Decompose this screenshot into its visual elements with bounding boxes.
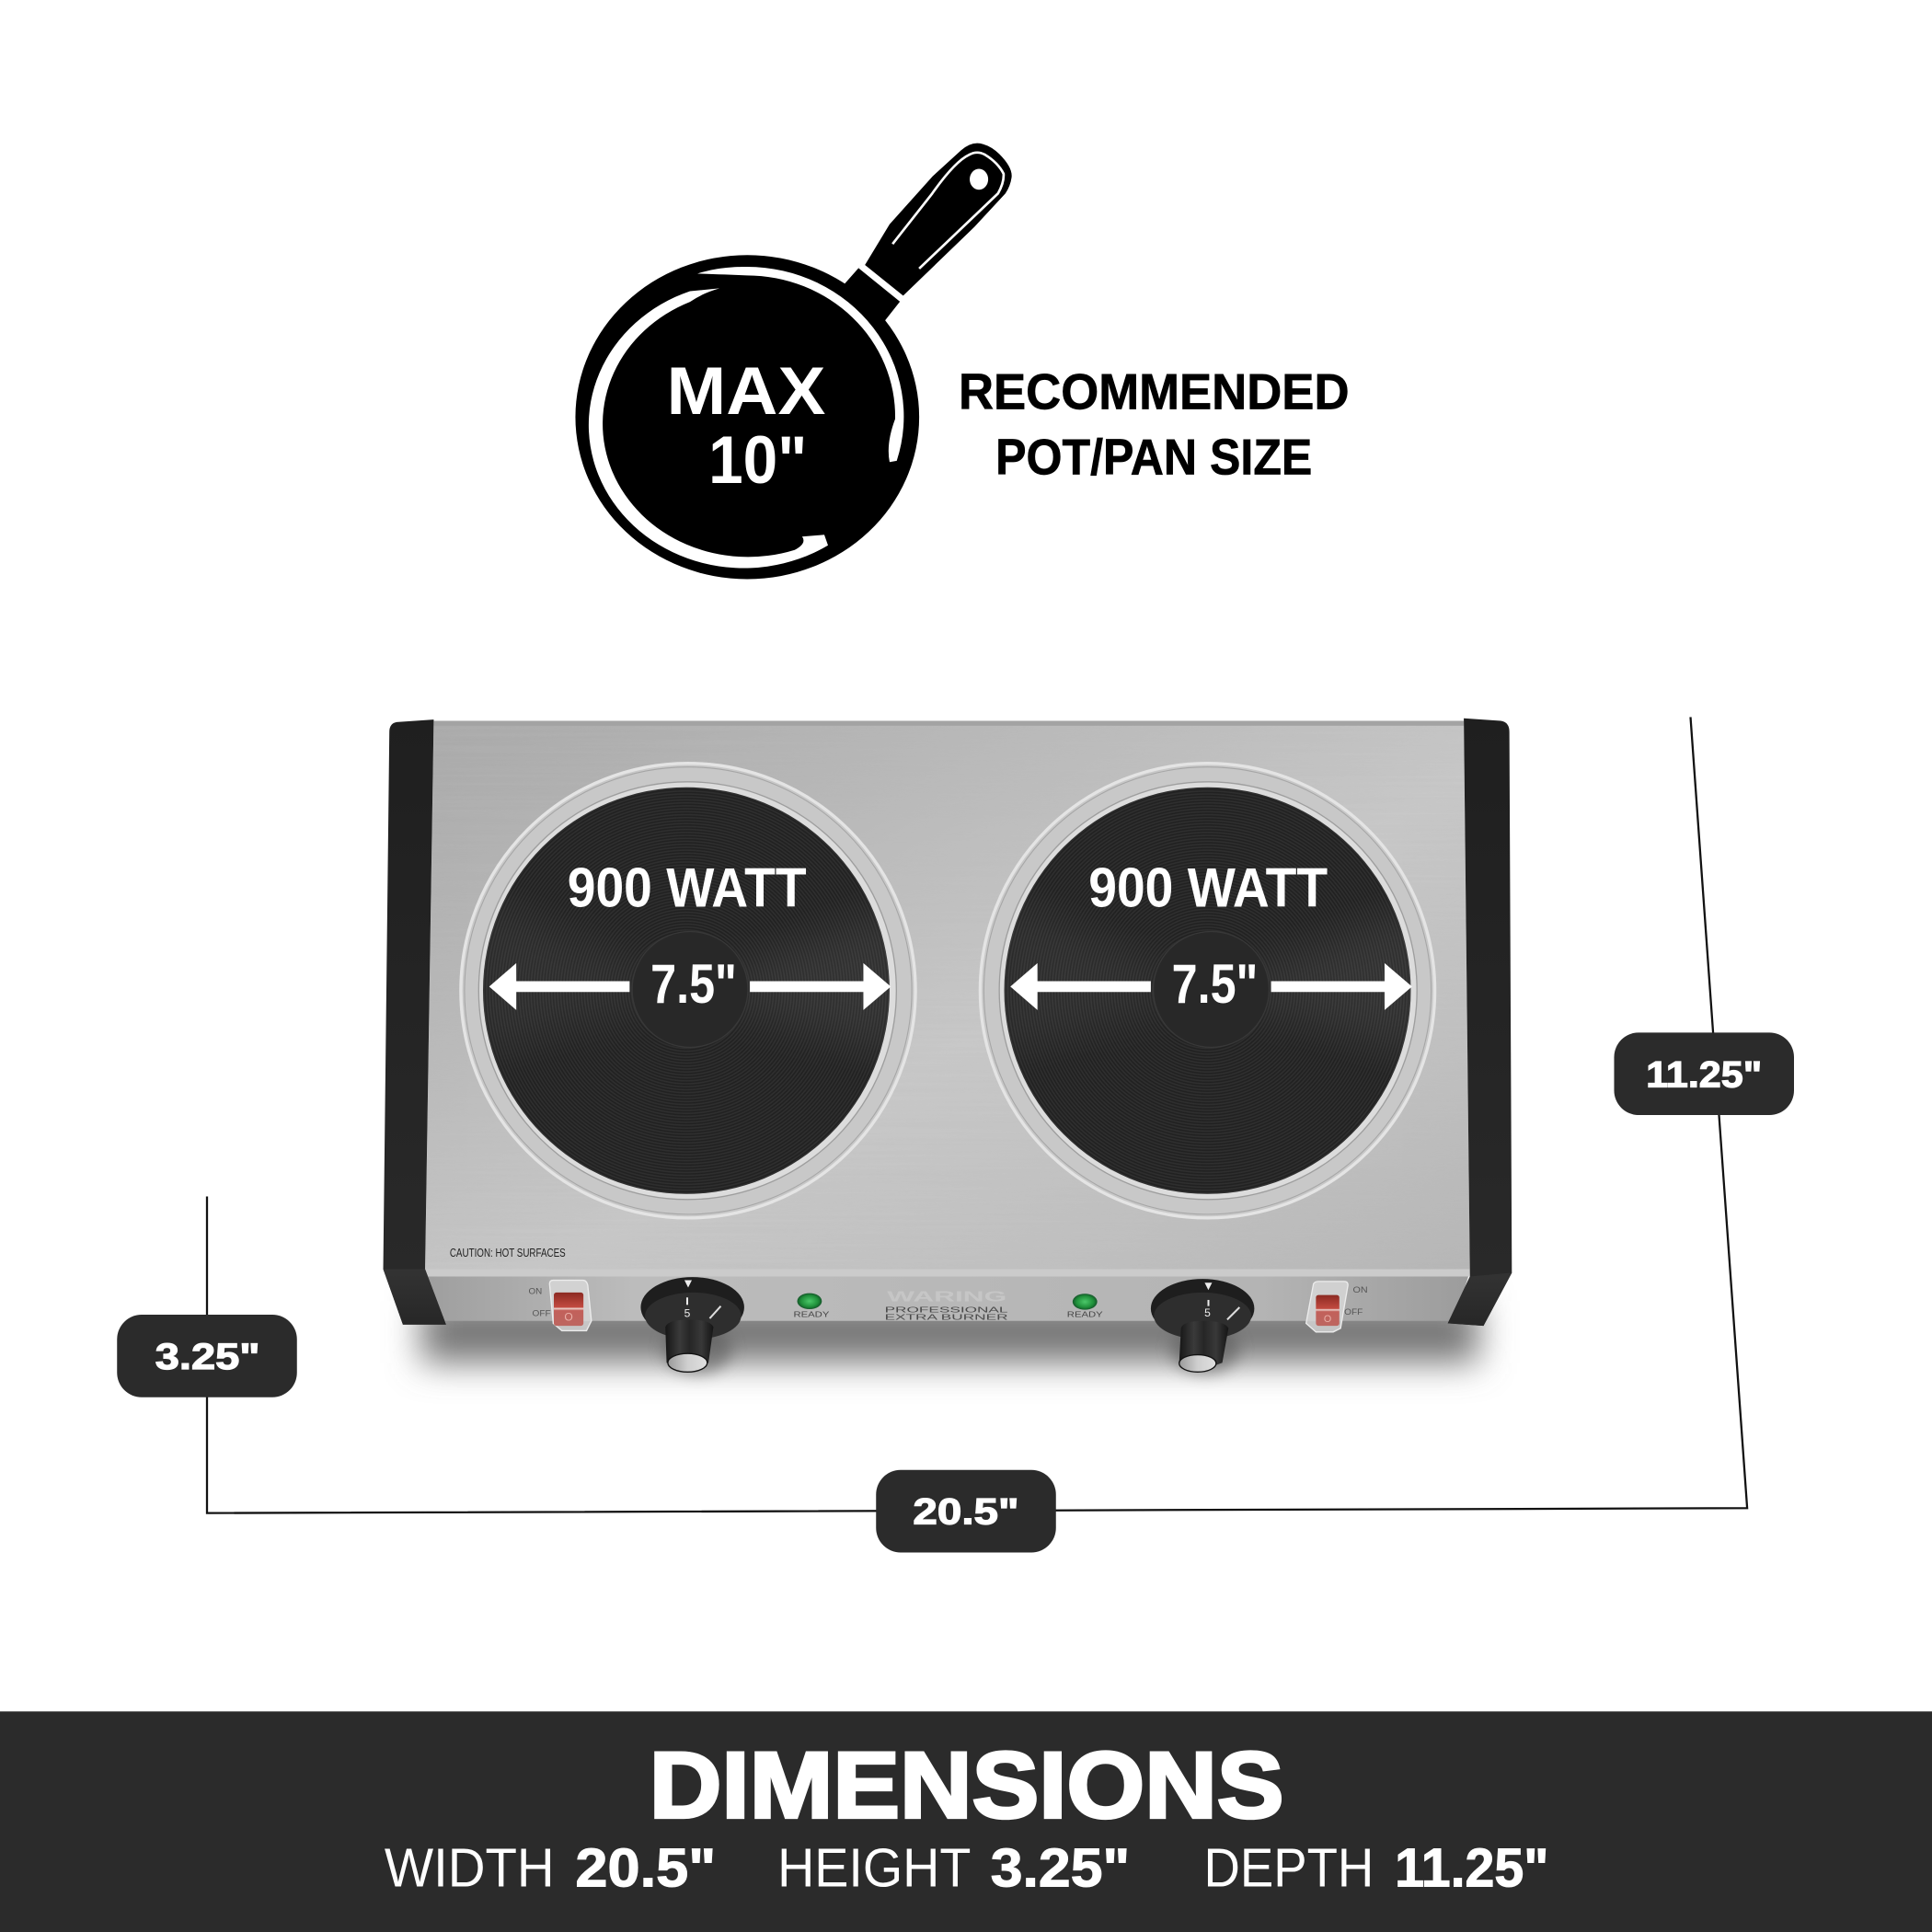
wattage: 900 WATT xyxy=(1088,857,1328,919)
banner specs xyxy=(385,1838,1548,1898)
pan neck xyxy=(843,265,901,324)
caution text: CAUTION: HOT SURFACES xyxy=(450,1246,566,1259)
dimension tag: height: 3.25" xyxy=(155,1336,260,1377)
right power switch: OFF xyxy=(1344,1307,1363,1317)
brand label xyxy=(885,1288,1009,1321)
heading: recommended pot/pan size: POT/PAN SIZE xyxy=(995,429,1312,486)
floor shadow xyxy=(421,1301,1478,1363)
right temperature knob xyxy=(1151,1279,1254,1374)
left temperature knob: 5 xyxy=(684,1307,691,1320)
right ready light: READY xyxy=(1067,1310,1103,1319)
left ready light: READY xyxy=(793,1310,830,1319)
steel top panel xyxy=(425,722,1470,1274)
dimension tag: depth: 11.25" xyxy=(1646,1053,1762,1095)
icon: frying pan with max size xyxy=(575,144,1012,579)
burner: right xyxy=(980,764,1435,1218)
diameter value: 7.5" xyxy=(650,952,737,1015)
right power switch: ON xyxy=(1353,1285,1368,1294)
pan label: size: 10" xyxy=(708,421,807,498)
banner specs: WIDTH xyxy=(385,1838,555,1898)
dimension tag: width xyxy=(876,1470,1056,1553)
right black end cap xyxy=(1448,719,1512,1326)
appliance: double burner xyxy=(384,715,1512,1374)
left black end cap xyxy=(384,719,446,1325)
dimension lines xyxy=(207,717,1747,1513)
right temperature knob: 5 xyxy=(1204,1306,1211,1319)
heating disc xyxy=(483,788,890,1194)
left power switch: O xyxy=(564,1311,573,1324)
bottom banner xyxy=(0,1711,1932,1932)
pan label: max: MAX xyxy=(667,352,825,429)
banner specs: 20.5" xyxy=(575,1838,716,1898)
right power switch: O xyxy=(1324,1314,1331,1325)
diameter arrow xyxy=(1010,963,1412,1010)
neck divider xyxy=(860,266,902,300)
brand label: EXTRA BURNER xyxy=(885,1313,1008,1321)
diameter arrow xyxy=(489,963,891,1010)
left power switch xyxy=(529,1281,592,1330)
heading: recommended pot/pan size: RECOMMENDED xyxy=(959,363,1350,420)
rim highlight upper right xyxy=(697,267,903,462)
left power switch: ON xyxy=(529,1286,542,1295)
center hub xyxy=(1154,931,1269,1047)
banner specs: 3.25" xyxy=(991,1838,1130,1898)
handle hole xyxy=(970,168,988,190)
left power switch: OFF xyxy=(533,1308,551,1317)
pan handle xyxy=(865,144,1012,295)
dimension tag: height xyxy=(117,1315,297,1397)
right ready light xyxy=(1067,1294,1103,1319)
front control strip xyxy=(425,1271,1470,1321)
burner: left xyxy=(461,764,915,1218)
brand label: WARING xyxy=(887,1288,1006,1305)
brand label: PROFESSIONAL xyxy=(885,1305,1009,1314)
left temperature knob xyxy=(640,1277,744,1374)
dimension tag: width: 20.5" xyxy=(913,1491,1019,1533)
heating disc xyxy=(1005,788,1410,1194)
dimension tag: depth xyxy=(1614,1032,1794,1115)
rim highlight lower left xyxy=(589,288,828,569)
burner ring xyxy=(461,764,915,1218)
handle highlight xyxy=(892,153,1004,269)
heading: recommended pot/pan size xyxy=(959,363,1350,486)
panel edge highlights xyxy=(425,720,1470,1277)
center hub xyxy=(632,931,748,1047)
burner ring xyxy=(980,764,1435,1218)
right power switch xyxy=(1306,1282,1368,1332)
diameter value: 7.5" xyxy=(1172,952,1258,1015)
banner specs: HEIGHT xyxy=(777,1838,971,1898)
pan body xyxy=(575,255,919,579)
banner specs: DEPTH xyxy=(1203,1838,1374,1898)
left ready light xyxy=(793,1294,830,1319)
wattage: 900 WATT xyxy=(568,857,807,919)
banner specs: 11.25" xyxy=(1395,1838,1548,1898)
banner title: DIMENSIONS xyxy=(650,1732,1284,1837)
